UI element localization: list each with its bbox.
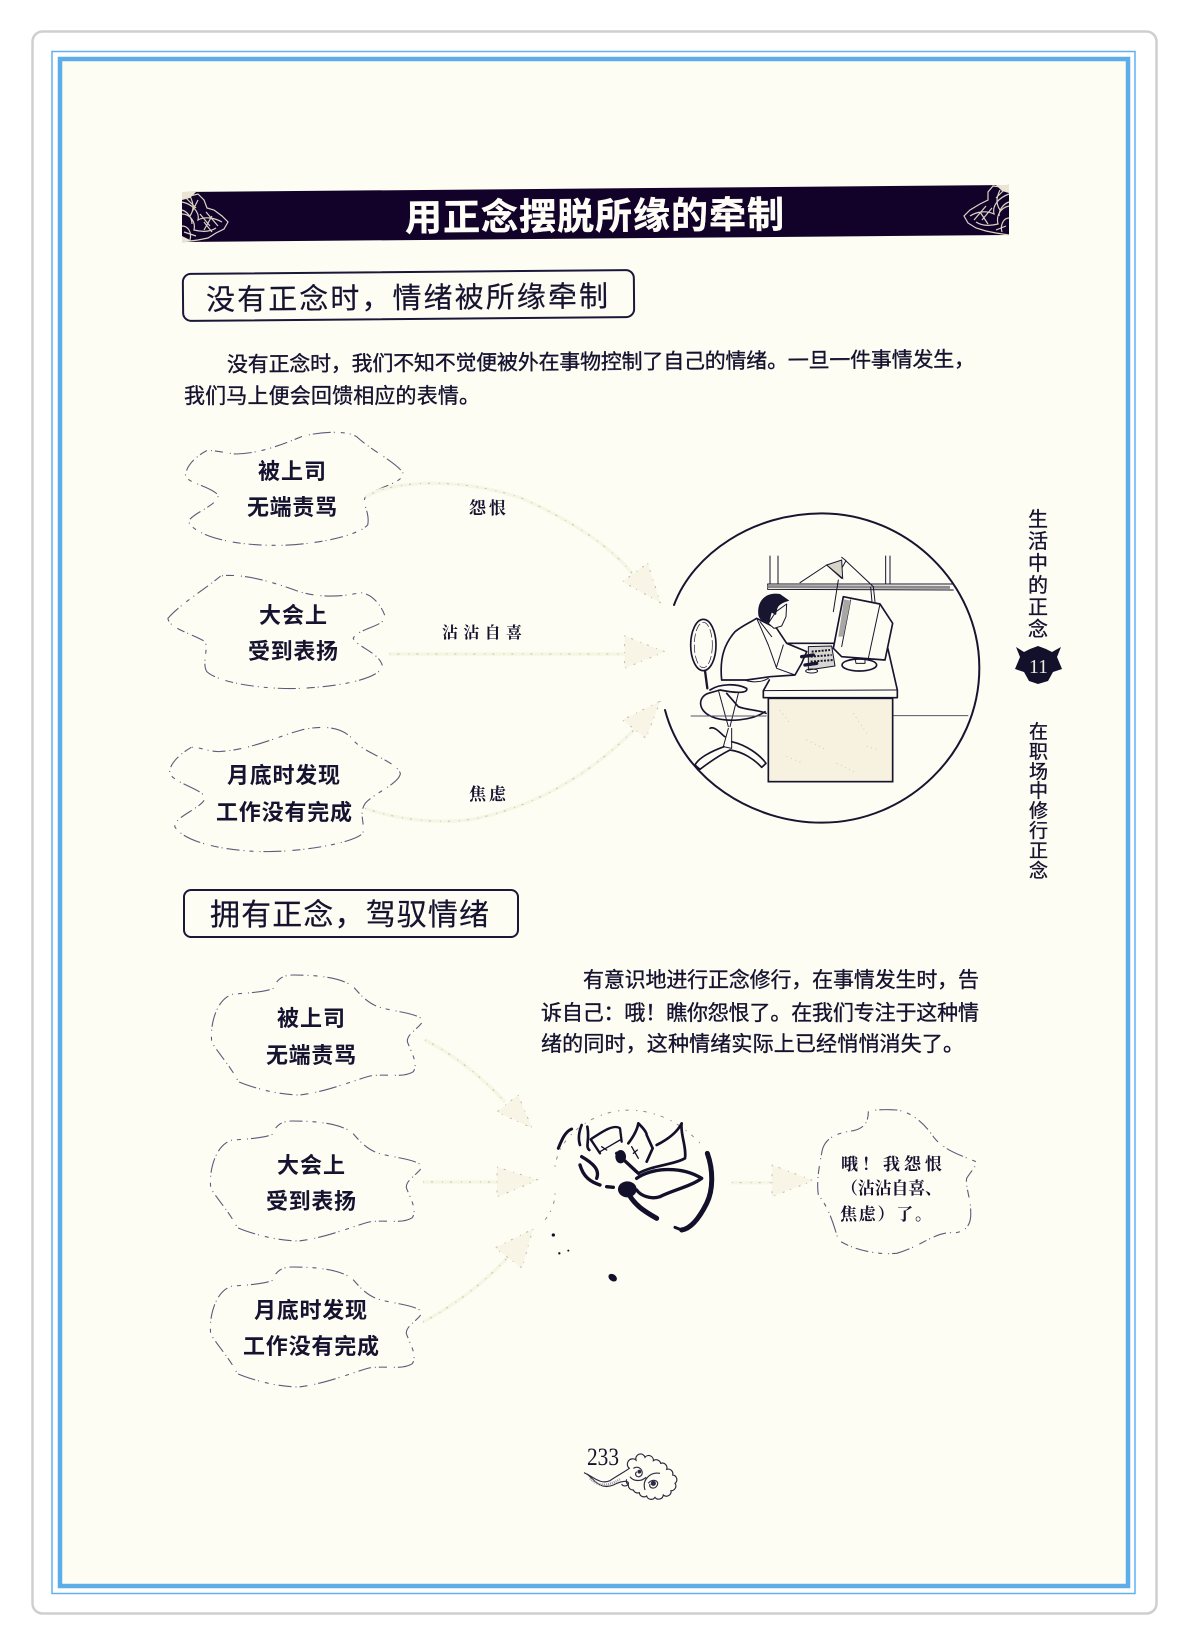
cloud: praised at meeting: 大会上 bbox=[259, 603, 327, 628]
lotus brush strokes bbox=[552, 1123, 712, 1283]
icon: right lotus ornament bbox=[964, 185, 1009, 235]
side text: chapter title: 修 bbox=[1029, 800, 1048, 822]
arrow: bottom bbox=[423, 1229, 533, 1322]
side text: chapter title: 在 bbox=[1029, 721, 1048, 743]
arrow: resentment bbox=[365, 483, 660, 603]
icon: left lotus ornament bbox=[182, 192, 228, 242]
arrow: self-satisfaction bbox=[389, 636, 665, 668]
side text: part title: 的 bbox=[1028, 574, 1048, 597]
paragraph: intro bbox=[184, 348, 975, 408]
title banner bbox=[182, 185, 1009, 242]
cloud: scolded by boss: 被上司 bbox=[258, 459, 326, 484]
cloud: unfinished work bbox=[210, 1267, 422, 1387]
arrow: middle bbox=[423, 1167, 538, 1197]
thought cloud: 哦！我怨恨 bbox=[841, 1155, 942, 1174]
side text: chapter title: 念 bbox=[1029, 859, 1048, 882]
side text: chapter title bbox=[1029, 721, 1048, 882]
paragraph: mindful practice: 绪的同时，这种情绪实际上已经悄悄消失了。 bbox=[541, 1033, 964, 1056]
cloud: praised at meeting: 大会上 bbox=[277, 1153, 345, 1178]
cloud: praised at meeting: 受到表扬 bbox=[266, 1189, 356, 1214]
window frame bbox=[768, 556, 953, 590]
cloud: unfinished work: 工作没有完成 bbox=[216, 800, 352, 825]
thought cloud bbox=[818, 1110, 976, 1254]
side tab: chapter label bbox=[1015, 508, 1062, 882]
diagram: without mindfulness clouds bbox=[168, 432, 403, 852]
side text: part title: 中 bbox=[1028, 552, 1048, 575]
side text: chapter title: 行 bbox=[1029, 820, 1048, 842]
paragraph: mindful practice: 诉自己：哦！瞧你怨恨了。在我们专注于这种情 bbox=[541, 1002, 979, 1025]
paragraph: intro: 没有正念时，我们不知不觉便被外在事物控制了自己的情绪。一旦一件事情发生， bbox=[227, 348, 975, 377]
arrow: top bbox=[425, 1040, 532, 1128]
side text: chapter title: 场 bbox=[1029, 761, 1048, 783]
paragraph: mindful practice: 有意识地进行正念修行，在事情发生时，告 bbox=[583, 969, 979, 992]
cloud: scolded by boss: 无端责骂 bbox=[247, 495, 337, 520]
desk lamp bbox=[800, 557, 875, 612]
thought cloud: 焦虑）了。 bbox=[840, 1205, 932, 1224]
diagram: with mindfulness clouds bbox=[210, 975, 423, 1387]
cloud: scolded by boss bbox=[211, 975, 423, 1095]
cloud: praised at meeting bbox=[210, 1121, 422, 1241]
office chair bbox=[691, 619, 766, 769]
paragraph: intro: 我们马上便会回馈相应的表情。 bbox=[184, 385, 480, 408]
illustration: ink lotus bbox=[543, 1110, 712, 1283]
faint circle bbox=[543, 1110, 703, 1222]
cloud: unfinished work: 工作没有完成 bbox=[243, 1334, 379, 1359]
heading: without mindfulness: 没有正念时，情绪被所缘牵制 bbox=[206, 280, 608, 317]
heading: with mindfulness bbox=[184, 890, 518, 937]
illustration: person at computer in circle bbox=[665, 513, 979, 823]
thought cloud: （沾沾自喜、 bbox=[841, 1178, 942, 1198]
label: self-satisfaction: 沾沾自喜 bbox=[442, 623, 522, 642]
cloud: scolded by boss: 无端责骂 bbox=[266, 1043, 356, 1068]
arrow: anxiety bbox=[365, 701, 660, 821]
side text: part title bbox=[1028, 508, 1048, 641]
icon: auspicious cloud bbox=[584, 1454, 677, 1499]
cloud: scolded by boss: 被上司 bbox=[277, 1006, 345, 1031]
heading: with mindfulness: 拥有正念，驾驭情绪 bbox=[210, 899, 489, 932]
circle outline bbox=[665, 513, 979, 823]
cloud: unfinished work: 月底时发现 bbox=[254, 1298, 367, 1323]
side text: part title: 活 bbox=[1028, 530, 1048, 553]
keyboard bbox=[808, 646, 835, 670]
label: resentment: 怨恨 bbox=[469, 499, 506, 518]
cloud: unfinished work bbox=[170, 727, 400, 852]
heading: without mindfulness bbox=[183, 270, 634, 321]
arrows: emotions into the office scene bbox=[365, 483, 665, 821]
title text: 用正念摆脱所缘的牵制 bbox=[405, 194, 784, 239]
badge: chapter 11 bbox=[1015, 646, 1062, 684]
cloud: scolded by boss bbox=[185, 432, 403, 545]
desk bbox=[763, 643, 897, 782]
cloud: praised at meeting bbox=[168, 575, 385, 689]
label: anxiety: 焦虑 bbox=[469, 785, 507, 804]
arrow: lotus to thought bbox=[732, 1165, 813, 1197]
cloud: praised at meeting: 受到表扬 bbox=[248, 639, 338, 664]
computer monitor bbox=[833, 597, 893, 671]
side text: chapter title: 中 bbox=[1029, 780, 1048, 802]
cloud: unfinished work: 月底时发现 bbox=[227, 763, 340, 788]
floor line bbox=[691, 714, 968, 717]
side text: part title: 正 bbox=[1028, 597, 1048, 619]
arrows: into the lotus bbox=[423, 1040, 538, 1322]
side text: part title: 生 bbox=[1028, 508, 1048, 531]
side text: chapter title: 正 bbox=[1029, 841, 1048, 862]
side text: chapter title: 职 bbox=[1029, 742, 1048, 763]
person bbox=[721, 594, 818, 713]
paragraph: mindful practice bbox=[541, 969, 979, 1056]
badge: chapter 11: 11 bbox=[1029, 656, 1048, 678]
side text: part title: 念 bbox=[1028, 617, 1048, 641]
page number: 233 bbox=[587, 1444, 619, 1471]
